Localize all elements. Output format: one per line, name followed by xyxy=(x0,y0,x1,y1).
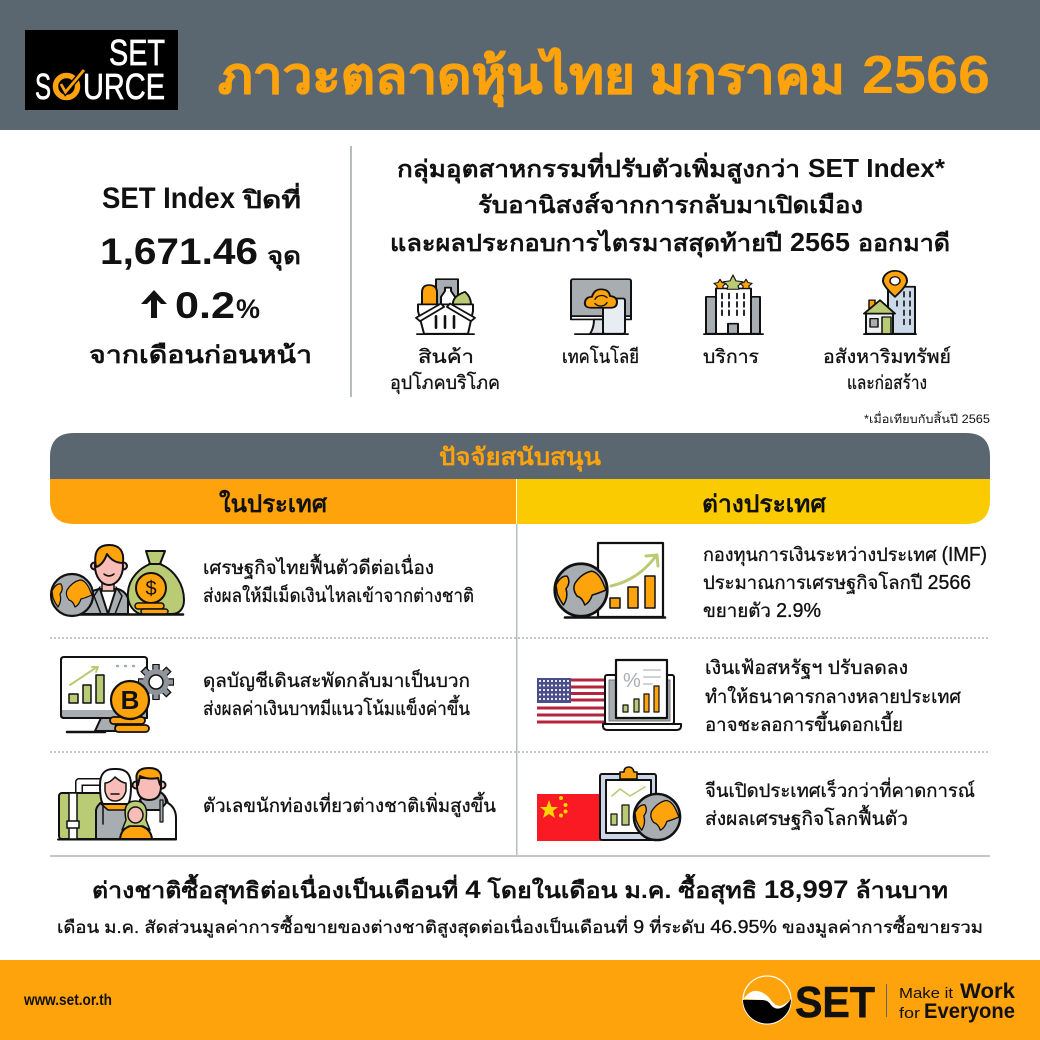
icon labels: สินค้า xyxy=(418,347,474,368)
icon: monitor, baht coin and gear xyxy=(61,657,174,732)
text: US inflation: เงินเฟ้อสหรัฐฯ ปรับลดลง xyxy=(705,658,908,679)
text: current account: ดุลบัญชีเดินสะพัดกลับมาเป็นบวก xyxy=(203,668,470,693)
heading: sectors above SET Index: รับอานิสงส์จากการกลับมาเปิดเมือง xyxy=(478,192,863,218)
flag: United States xyxy=(537,678,605,723)
heading: sectors above SET Index: กลุ่มอุตสาหกรรมที่ปรับตัวเพิ่มสูงกว่า xyxy=(397,152,800,184)
flag: China xyxy=(537,794,601,841)
tagline: Everyone xyxy=(924,1000,1015,1023)
icon: consumer goods basket xyxy=(416,279,475,334)
icon labels: เทคโนโลยี xyxy=(562,345,639,368)
panel: SET Index summary xyxy=(89,182,312,369)
tagline: Make it xyxy=(899,985,954,1002)
logo: SET Source: URCE xyxy=(83,66,165,107)
text: Thai economy recovery: ส่งผลให้มีเม็ดเงินไหลเข้าจากต่างชาติ xyxy=(203,583,474,607)
panel: SET Index summary: ปิดที่ xyxy=(242,182,301,214)
icon: US flag and laptop report: % xyxy=(623,670,641,692)
logo: SET Source xyxy=(25,30,178,110)
text: foreign net buying: เดือน ม.ค. สัดส่วนมูลค่าการซื้อขายของต่างชาติสูงสุดต่อเนื่องเป็นเดือนที่ 9 ที่ระดับ 46.95% ของมูลค่าการซื้อขายรวม xyxy=(57,915,983,938)
text: IMF forecast: กองทุนการเงินระหว่างประเทศ (IMF) xyxy=(703,544,987,567)
panel: SET Index summary: SET Index xyxy=(102,182,235,215)
icon: China flag and clipboard xyxy=(537,767,680,841)
panel: supporting factors header: ปัจจัยสนับสนุน xyxy=(439,444,602,473)
panel: SET Index summary: 1,671.46 xyxy=(100,231,258,272)
text: China reopening xyxy=(705,777,975,830)
text: foreign net buying: ต่างชาติซื้อสุทธิต่อเนื่องเป็นเดือนที่ 4 โดยในเดือน ม.ค. ซื้อสุทธิ 18,997 ล้านบาท xyxy=(92,873,948,905)
icon: US flag and laptop report xyxy=(537,660,681,730)
icon labels: อสังหาริมทรัพย์ xyxy=(823,346,951,368)
text: US inflation: อาจชะลอการขึ้นดอกเบี้ย xyxy=(705,711,903,736)
icon: up arrow xyxy=(141,290,167,318)
icon: person, globe and money bag xyxy=(51,545,184,616)
logo: SET: SET xyxy=(795,978,875,1027)
tagline xyxy=(899,980,1015,1023)
text: US inflation xyxy=(705,658,961,736)
icon labels: และก่อสร้าง xyxy=(847,373,927,394)
panel: SET Index summary: จุด xyxy=(267,243,301,272)
text: Thai economy recovery xyxy=(203,554,474,607)
icon labels: บริการ xyxy=(703,347,759,368)
footnote: *เมื่อเทียบกับสิ้นปี 2565 xyxy=(864,411,990,426)
footer band xyxy=(0,960,1040,1040)
title: ภาวะตลาดหุ้นไทย มกราคม xyxy=(218,47,845,107)
panel: SET Index summary: % xyxy=(236,294,260,324)
heading: sectors above SET Index: ออกมาดี xyxy=(858,230,950,256)
website: www.set.or.th xyxy=(23,992,112,1009)
heading: sectors above SET Index: 2565 xyxy=(790,227,850,257)
icon labels xyxy=(390,345,951,395)
logo: SET Source: S xyxy=(35,66,51,107)
panel header: international: ต่างประเทศ xyxy=(702,491,827,518)
text: China reopening: ส่งผลเศรษฐกิจโลกฟื้นตัว xyxy=(705,805,908,830)
heading: sectors above SET Index xyxy=(390,152,950,258)
text: foreign net buying xyxy=(57,873,983,938)
panel header: domestic xyxy=(50,479,516,524)
text: IMF forecast: ประมาณการเศรษฐกิจโลกปี 2566 xyxy=(703,571,971,594)
text: China reopening: จีนเปิดประเทศเร็วกว่าที่คาดการณ์ xyxy=(705,777,975,802)
panel header: domestic: ในประเทศ xyxy=(219,489,328,518)
text: current account xyxy=(203,668,470,720)
icon: person, globe and money bag: $ xyxy=(145,578,157,600)
heading: sectors above SET Index: และผลประกอบการไตรมาสสุดท้ายปี xyxy=(390,229,782,258)
text: IMF forecast: ขยายตัว 2.9% xyxy=(703,600,821,622)
header band xyxy=(0,0,1040,130)
logo: SET Source: SET xyxy=(109,32,165,73)
panel: supporting factors header xyxy=(50,433,990,479)
text: IMF forecast xyxy=(703,544,987,622)
text: foreign tourists: ตัวเลขนักท่องเที่ยวต่างชาติเพิ่มสูงขึ้น xyxy=(203,792,496,817)
text: US inflation: ทำให้ธนาคารกลางหลายประเทศ xyxy=(705,686,961,708)
icon: real estate xyxy=(864,271,916,334)
icon: services hotel xyxy=(704,275,763,334)
title xyxy=(218,45,990,107)
panel: SET Index summary: จากเดือนก่อนหน้า xyxy=(89,342,312,369)
heading: sectors above SET Index: SET Index* xyxy=(808,153,946,183)
title: 2566 xyxy=(862,45,990,105)
panel: SET Index summary: 0.2 xyxy=(175,285,235,326)
text: current account: ส่งผลค่าเงินบาทมีแนวโน้มแข็งค่าขึ้น xyxy=(203,695,470,720)
icon labels: อุปโภคบริโภค xyxy=(390,371,500,395)
panel header: international xyxy=(517,479,990,524)
tagline: Work xyxy=(960,980,1015,1003)
text: Thai economy recovery: เศรษฐกิจไทยฟื้นตัวดีต่อเนื่อง xyxy=(203,554,434,579)
icon: monitor, baht coin and gear: B xyxy=(121,685,139,715)
tagline: for xyxy=(899,1005,920,1022)
icon: tourist family with luggage xyxy=(58,768,176,840)
icon: technology monitor xyxy=(571,279,631,334)
icon: globe and growth chart xyxy=(555,543,665,618)
logo: SET xyxy=(743,976,875,1027)
